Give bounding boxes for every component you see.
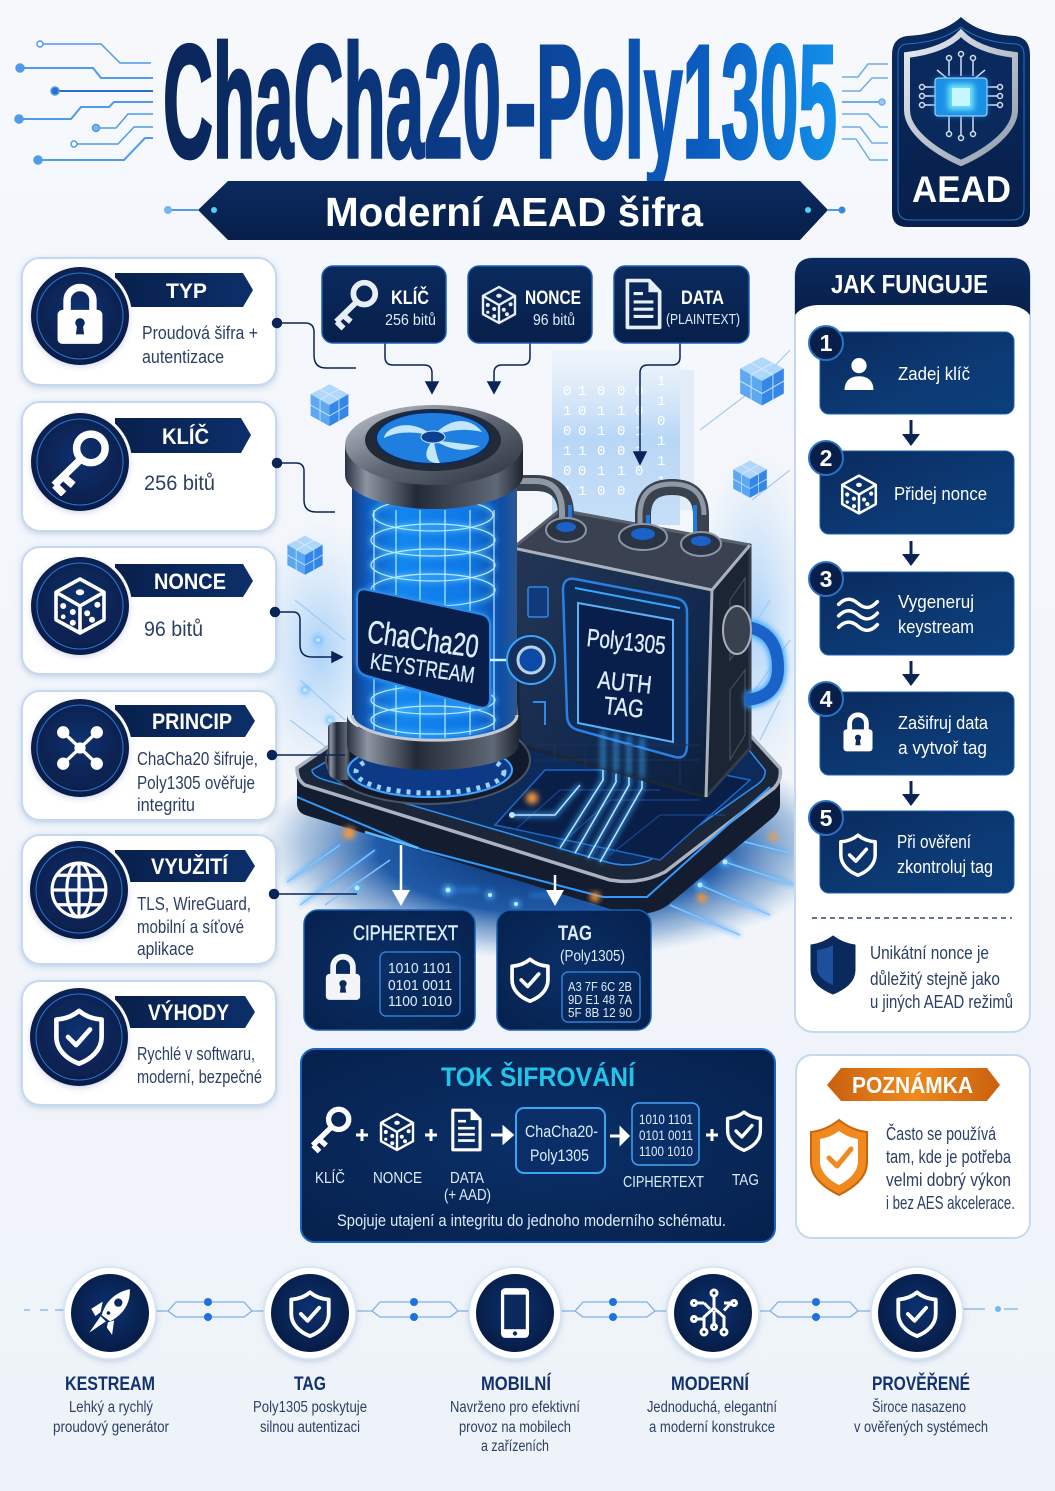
heading ribbon: VYUŽITÍ: VYUŽITÍ (151, 854, 229, 879)
icon: orange shield (811, 1120, 867, 1195)
text: VÝHODY body: Rychlé v softwaru, (137, 1044, 255, 1064)
icon: network hub (28, 696, 132, 800)
flow labels: DATA (450, 1170, 485, 1187)
heading ribbon: VYUŽITÍ (115, 850, 255, 882)
icon: dice (28, 554, 132, 658)
arrow (902, 781, 920, 806)
text: note: tam, kde je potřeba (886, 1147, 1012, 1167)
input box: KLÍČ: KLÍČ (391, 287, 429, 309)
heading ribbon: NONCE (115, 564, 253, 597)
feature: PROVĚŘENÉ: Široce nasazeno (872, 1399, 966, 1416)
box: ChaCha20-Poly1305: Poly1305 (530, 1146, 589, 1165)
feature: MODERNÍ: a moderní konstrukce (649, 1419, 775, 1436)
text: VYUŽITÍ body: aplikace (137, 939, 194, 959)
panel: VÝHODY (22, 981, 276, 1105)
panel: PRINCIP (22, 691, 276, 820)
title: - (504, 12, 537, 192)
icon: floating cubes (287, 357, 784, 575)
header circuit lines left (15, 41, 153, 164)
icon: shield (264, 1267, 356, 1359)
input box: NONCE: NONCE (525, 288, 581, 309)
input box: DATA: DATA (681, 288, 724, 309)
box: ChaCha20-Poly1305 (516, 1108, 605, 1173)
step 5 (809, 801, 1014, 893)
arrow (902, 420, 920, 446)
panel: TOK ŠIFROVÁNÍ (301, 1049, 775, 1242)
text: KLÍČ body: 256 bitů (144, 472, 215, 495)
feature: PROVĚŘENÉ: PROVĚŘENÉ (872, 1371, 970, 1395)
panel: KLÍČ (22, 402, 276, 531)
flow labels: NONCE (373, 1170, 422, 1187)
icon: key (28, 410, 132, 514)
AEAD badge (892, 17, 1030, 227)
step 5: 5 (820, 805, 833, 831)
feature: MOBILNÍ: MOBILNÍ (481, 1372, 551, 1395)
heading ribbon: NONCE: NONCE (154, 569, 226, 594)
text: note: Často se používá (886, 1123, 997, 1144)
feature: MOBILNÍ: a zařízeních (481, 1438, 549, 1455)
box: ciphertext bits (632, 1103, 699, 1165)
text: VYUŽITÍ body: mobilní a síťové (137, 917, 244, 937)
icon: shield (871, 1267, 963, 1359)
text: VYUŽITÍ body (137, 894, 251, 959)
text: PRINCIP body: integritu (137, 795, 195, 815)
step 1 (809, 326, 1014, 414)
text: PRINCIP body: Poly1305 ověřuje (137, 773, 255, 793)
heading ribbon: TYP (115, 273, 253, 307)
output box: CIPHERTEXT: 1100 1010 (388, 993, 452, 1010)
binary data stream: 00110 (635, 384, 643, 480)
Poly1305 module (513, 481, 778, 797)
output box: TAG: 5F 8B 12 90 (568, 1006, 632, 1020)
icon: rocket (64, 1267, 156, 1359)
feature: MOBILNÍ: provoz na mobilech (459, 1419, 571, 1436)
output box: TAG (497, 910, 651, 1030)
heading ribbon: VÝHODY: VÝHODY (148, 1000, 229, 1025)
arrows to outputs (392, 845, 564, 906)
feature: MOBILNÍ (450, 1267, 581, 1455)
feature: MODERNÍ: MODERNÍ (671, 1372, 749, 1395)
panel: JAK FUNGUJE (795, 258, 1030, 1032)
binary data stream: 100101 (578, 384, 586, 500)
output box: CIPHERTEXT (304, 910, 475, 1030)
step 4: a vytvoř tag (898, 737, 987, 758)
output box: CIPHERTEXT: CIPHERTEXT (353, 922, 458, 945)
flow labels (315, 1170, 759, 1204)
input box: DATA (614, 266, 749, 343)
heading: JAK FUNGUJE: JAK FUNGUJE (831, 269, 988, 299)
Poly1305 module: AUTH (596, 666, 653, 700)
step 4: Zašifruj data (898, 712, 989, 733)
step 3: 3 (820, 566, 832, 592)
feature: PROVĚŘENÉ: v ověřených systémech (854, 1419, 988, 1436)
output box: TAG: TAG (558, 922, 592, 945)
step 3: Vygeneruj (898, 591, 974, 612)
binary data stream: 011010 (597, 384, 605, 500)
title: ChaCha20 (163, 12, 501, 192)
arrow (902, 661, 920, 686)
step 4 (809, 682, 1014, 775)
box: ciphertext bits: 0101 0011 (639, 1128, 693, 1143)
background circuit glow (260, 730, 840, 960)
feature: KESTREAM (53, 1267, 169, 1436)
connector lines from panels (268, 318, 357, 898)
text: note: velmi dobrý výkon (886, 1170, 1011, 1190)
feature: TAG (253, 1267, 367, 1436)
text: TYP body: Proudová šifra + (142, 323, 258, 343)
feature: MODERNÍ: Jednoduchá, elegantní (647, 1399, 778, 1416)
binary data stream: 010101 (563, 384, 571, 500)
feature: KESTREAM: proudový generátor (53, 1419, 169, 1436)
icon: circuit (667, 1267, 759, 1359)
step 2: 2 (820, 445, 832, 471)
text: VÝHODY body (137, 1044, 262, 1087)
ChaCha20 label plate: KEYSTREAM (369, 648, 476, 688)
input box: NONCE (468, 266, 592, 343)
machine base platform (297, 730, 780, 914)
feature: PROVĚŘENÉ (854, 1267, 988, 1436)
Poly1305 module: Poly1305 (586, 624, 667, 660)
feature: MOBILNÍ: Navrženo pro efektivní (450, 1399, 581, 1416)
step 5: zkontroluj tag (897, 856, 993, 877)
feature: TAG: silnou autentizaci (260, 1419, 360, 1436)
subtitle banner (164, 181, 846, 240)
arrows from inputs (385, 343, 680, 464)
output box: CIPHERTEXT: 0101 0011 (388, 977, 452, 994)
box: ciphertext bits: 1100 1010 (639, 1144, 693, 1159)
arrow (902, 541, 920, 566)
icon: note shield (811, 936, 855, 994)
pipes (515, 481, 778, 700)
step 4: 4 (820, 686, 833, 712)
AEAD badge: AEAD (912, 169, 1011, 210)
step 1: Zadej klíč (898, 363, 970, 384)
binary data stream: 110111 (657, 374, 665, 490)
feature: MODERNÍ (647, 1267, 778, 1436)
feature: KESTREAM: KESTREAM (65, 1373, 155, 1395)
caption: Spojuje utajení a integritu do jednoho moderního schématu. (337, 1212, 726, 1230)
heading ribbon: PRINCIP (115, 705, 255, 737)
flow labels: KLÍČ (315, 1170, 345, 1187)
heading ribbon: TYP: TYP (166, 280, 207, 303)
central illustration (250, 350, 840, 960)
text: PRINCIP body: ChaCha20 šifruje, (137, 749, 258, 769)
step 5: Při ověření (897, 831, 972, 852)
header circuit lines right (842, 64, 888, 160)
text: VÝHODY body: moderní, bezpečné (137, 1067, 262, 1087)
heading ribbon: PRINCIP: PRINCIP (152, 709, 232, 734)
text: TYP body (142, 323, 258, 367)
feature: TAG: Poly1305 poskytuje (253, 1399, 367, 1416)
binary data stream: 010010 (617, 384, 625, 500)
ChaCha20 cylinder (326, 405, 555, 804)
heading ribbon: POZNÁMKA (827, 1068, 1000, 1101)
heading: JAK FUNGUJE (795, 258, 1030, 315)
input box: NONCE: 96 bitů (533, 312, 575, 329)
text: PRINCIP body (137, 749, 258, 815)
panel: POZNÁMKA (796, 1055, 1030, 1238)
binary data stream (552, 350, 694, 525)
ChaCha20 label plate (357, 589, 490, 708)
heading ribbon: KLÍČ (115, 418, 251, 453)
text: nonce note: u jiných AEAD režimů (870, 992, 1013, 1012)
text: nonce note: Unikátní nonce je (870, 943, 989, 963)
icon: globe (27, 838, 131, 942)
output box: TAG: 9D E1 48 7A (568, 993, 633, 1007)
step 3: keystream (898, 616, 974, 637)
box: ciphertext bits: 1010 1101 (639, 1112, 693, 1127)
icon: phone (469, 1267, 561, 1359)
flow labels: CIPHERTEXT (623, 1174, 704, 1191)
Poly1305 module: TAG (602, 692, 645, 724)
step 3 (809, 562, 1014, 655)
step 2 (809, 441, 1014, 534)
panel: VYUŽITÍ (22, 835, 276, 964)
text: TYP body: autentizace (142, 347, 224, 367)
text: NONCE body: 96 bitů (144, 618, 203, 641)
step 2: Přidej nonce (894, 483, 987, 504)
panel: NONCE (22, 547, 276, 674)
flow icons (313, 1109, 760, 1152)
heading: TOK ŠIFROVÁNÍ: TOK ŠIFROVÁNÍ (441, 1061, 636, 1092)
icon: lock (28, 264, 132, 368)
input box: DATA: (PLAINTEXT) (666, 312, 740, 328)
feature: KESTREAM: Lehký a rychlý (69, 1399, 153, 1416)
feature: TAG: TAG (294, 1373, 326, 1395)
output box: CIPHERTEXT: 1010 1101 (388, 960, 452, 977)
flow labels: (+ AAD) (444, 1187, 491, 1204)
icon: shield (27, 985, 131, 1089)
text: VYUŽITÍ body: TLS, WireGuard, (137, 894, 251, 914)
bottom connectors (24, 1298, 1018, 1321)
heading ribbon: VÝHODY (115, 996, 255, 1028)
input box: KLÍČ (322, 266, 446, 343)
panel: TYP (22, 258, 276, 385)
subtitle banner: Moderní AEAD šifra (325, 189, 704, 235)
step 1: 1 (820, 330, 833, 356)
ChaCha20 label plate: ChaCha20 (365, 613, 481, 665)
text: note (886, 1123, 1015, 1213)
heading ribbon: KLÍČ: KLÍČ (162, 424, 209, 449)
text: nonce note (870, 943, 1013, 1012)
box: ChaCha20-Poly1305: ChaCha20- (525, 1122, 598, 1141)
output box: TAG: A3 7F 6C 2B (568, 980, 632, 994)
heading ribbon: POZNÁMKA: POZNÁMKA (852, 1071, 973, 1098)
text: nonce note: důležitý stejně jako (870, 969, 1000, 989)
output box: TAG: (Poly1305) (560, 948, 625, 965)
flow labels: TAG (732, 1172, 759, 1189)
input box: KLÍČ: 256 bitů (385, 312, 436, 329)
